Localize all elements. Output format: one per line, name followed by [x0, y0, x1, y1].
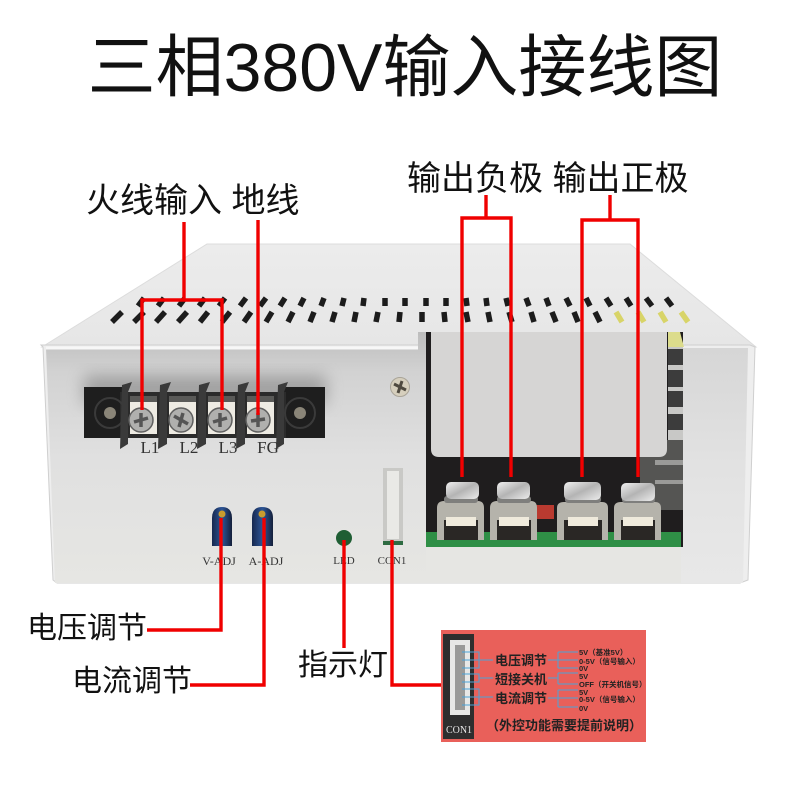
title: 三相380V输入接线图: [88, 30, 722, 106]
opening with components: [426, 332, 684, 547]
pin value labels: 5V: [579, 672, 588, 681]
terminal labels: [141, 438, 279, 457]
LED: [336, 530, 352, 546]
CON1 pinout panel: [441, 630, 646, 742]
connector picture: CON1: [446, 725, 472, 736]
front panel: [46, 332, 426, 583]
panel screw: [390, 378, 410, 396]
pin value labels: 0-5V（信号输入）: [579, 656, 640, 666]
adjustment labels: A-ADJ: [249, 554, 284, 568]
voltage and current trimmers: [212, 507, 273, 546]
terminal block: [84, 375, 326, 457]
pin value labels: 5V（基准5V）: [579, 647, 627, 657]
red wiring lines: [142, 195, 638, 685]
blue pin lines: [462, 652, 578, 707]
pin value labels: 0V: [579, 664, 588, 673]
adjustment labels: [202, 554, 284, 568]
pin value labels: 5V: [579, 688, 588, 697]
top cover with vents: [42, 244, 756, 347]
external control note: （外控功能需要提前说明）: [486, 718, 642, 733]
label: current adjust: 电流调节: [72, 665, 192, 698]
terminal labels: L3: [219, 438, 237, 457]
pin value labels: 0V: [579, 704, 588, 713]
power supply unit: [41, 244, 756, 583]
pin value labels: 0-5V（信号输入）: [579, 694, 640, 704]
white shield: [431, 332, 667, 457]
pin function labels: [495, 653, 547, 706]
outer flanges: [41, 345, 755, 583]
label: indicator light: 指示灯: [298, 649, 388, 682]
adjustment labels: V-ADJ: [202, 554, 236, 568]
LED label: LED: [333, 555, 355, 567]
terminal labels: FG: [257, 438, 279, 457]
CON1 label: CON1: [378, 555, 406, 567]
output bolts: [437, 482, 661, 540]
label: output negative and positive: 输出负极 输出正极: [407, 160, 688, 198]
connector picture: [443, 634, 474, 739]
pin value labels: [579, 647, 646, 713]
label: voltage adjust: 电压调节: [27, 612, 147, 645]
CON1 connector: [383, 468, 403, 545]
pin function labels: 电流调节: [495, 691, 547, 706]
pin function labels: 短接关机: [495, 672, 547, 687]
terminal labels: L2: [180, 438, 198, 457]
label: live input and ground: 火线输入 地线: [86, 182, 299, 220]
pin function labels: 电压调节: [495, 653, 547, 668]
pin value labels: OFF（开关机信号）: [579, 679, 646, 689]
terminal labels: L1: [141, 438, 159, 457]
